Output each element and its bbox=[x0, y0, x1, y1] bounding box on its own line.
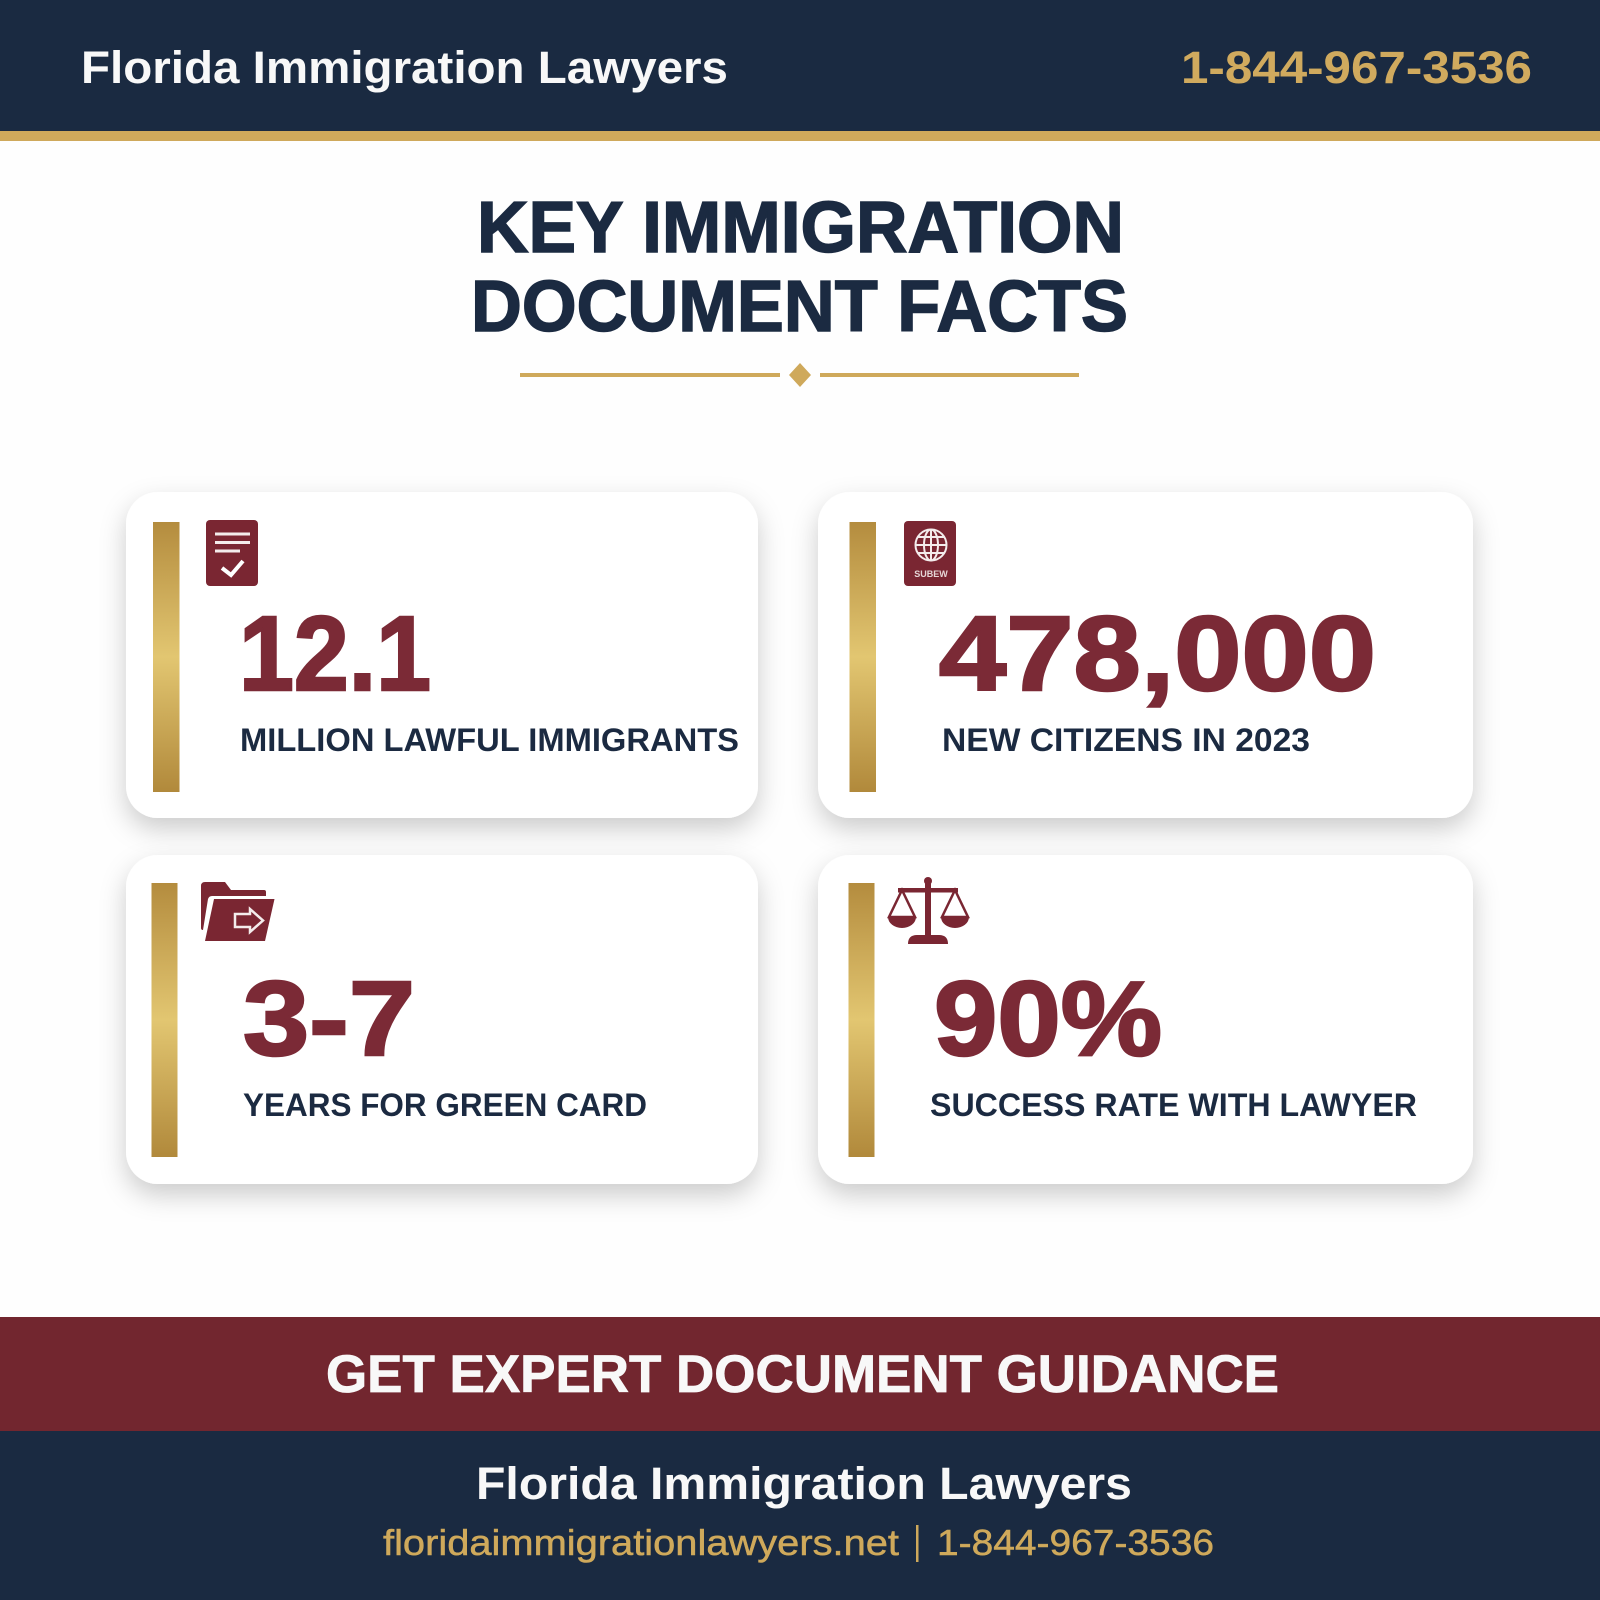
footer separator bbox=[916, 1525, 918, 1562]
call to action banner bbox=[0, 1317, 1600, 1431]
panel: 478,000 new citizens bbox=[818, 492, 1473, 818]
stat label: YEARS FOR GREEN CARD bbox=[243, 1087, 647, 1123]
gold accent bar bbox=[848, 883, 874, 1157]
footer phone: 1-844-967-3536 bbox=[937, 1522, 1214, 1563]
header bar bbox=[0, 0, 1600, 141]
footer bbox=[0, 1431, 1600, 1600]
icon: folder with arrow bbox=[201, 882, 274, 941]
stat number: 3-7 bbox=[243, 960, 415, 1078]
panel: 3-7 years for green card bbox=[126, 855, 758, 1184]
header phone: 1-844-967-3536 bbox=[1181, 42, 1532, 93]
icon: scales of justice bbox=[888, 877, 969, 944]
footer website: floridaimmigrationlawyers.net bbox=[383, 1522, 899, 1563]
stat label: MILLION LAWFUL IMMIGRANTS bbox=[240, 722, 739, 758]
stat label: NEW CITIZENS IN 2023 bbox=[942, 722, 1310, 758]
header firm name: Florida Immigration Lawyers bbox=[81, 42, 728, 93]
icon: passport with globe: SUBEW bbox=[914, 569, 948, 579]
gold accent bar bbox=[850, 522, 876, 792]
title: DOCUMENT FACTS bbox=[471, 267, 1128, 347]
stat label: SUCCESS RATE WITH LAWYER bbox=[930, 1087, 1417, 1123]
icon: document with check bbox=[206, 520, 258, 586]
footer firm name: Florida Immigration Lawyers bbox=[476, 1458, 1132, 1509]
gold accent bar bbox=[153, 522, 180, 792]
icon: passport with globe bbox=[904, 521, 956, 586]
panel: 90% success rate bbox=[818, 855, 1473, 1184]
title bbox=[471, 188, 1128, 347]
stat number: 478,000 bbox=[939, 595, 1376, 713]
stat number: 12.1 bbox=[239, 595, 431, 713]
gold accent bar bbox=[152, 883, 178, 1157]
title: KEY IMMIGRATION bbox=[477, 188, 1124, 268]
panel: 12.1 million lawful immigrants bbox=[126, 492, 758, 818]
stat number: 90% bbox=[934, 960, 1162, 1078]
call to action banner: GET EXPERT DOCUMENT GUIDANCE bbox=[326, 1345, 1279, 1404]
title divider with diamond bbox=[520, 363, 1079, 387]
